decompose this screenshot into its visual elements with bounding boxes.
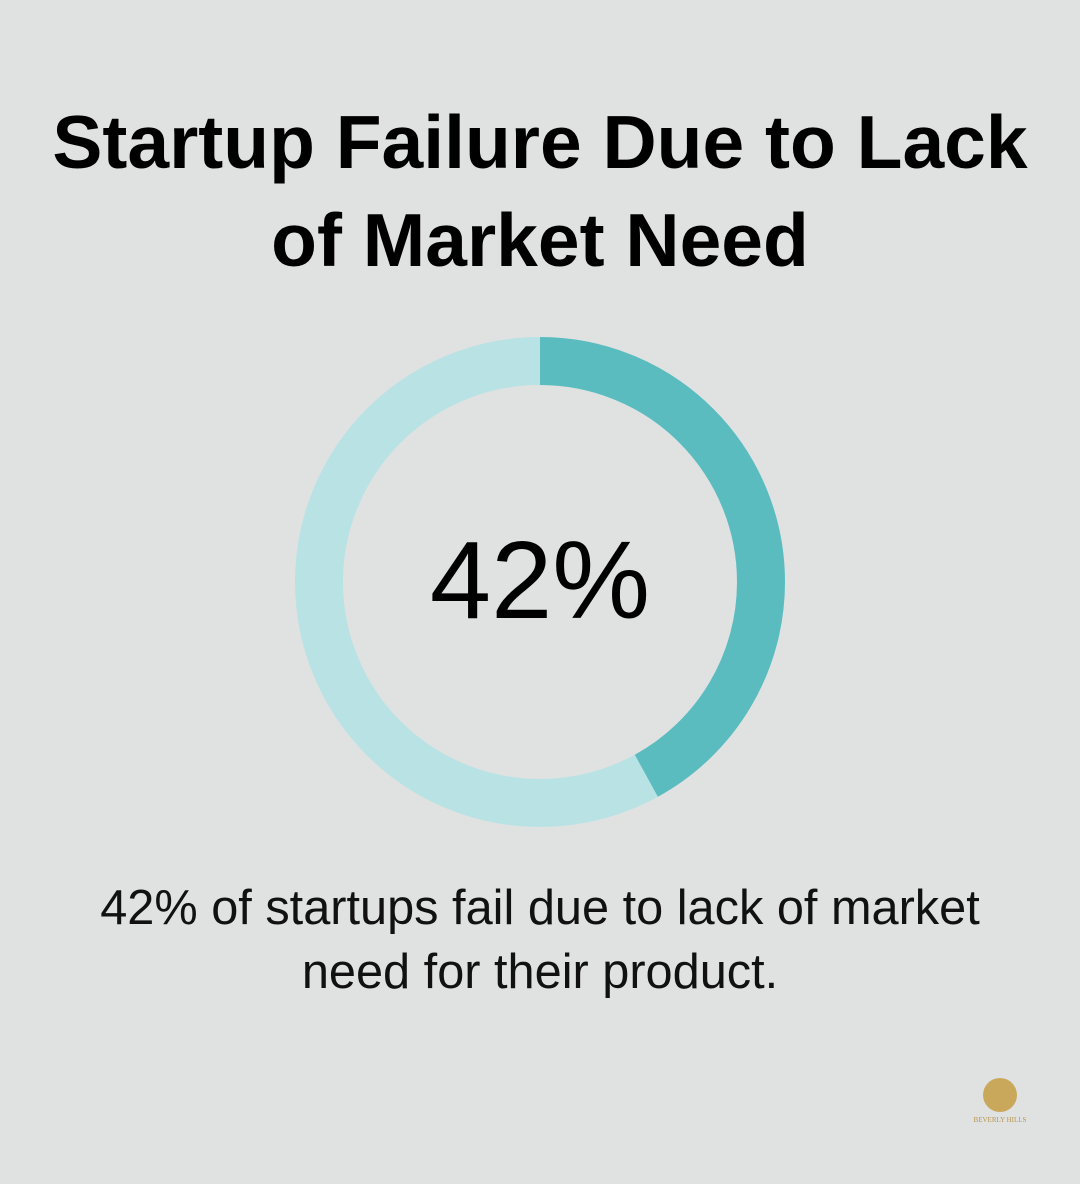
logo: [974, 1078, 1026, 1124]
description text: 42% of startups fail due to lack of market: [100, 881, 980, 935]
donut chart: 42%: [430, 519, 650, 642]
title: [52, 100, 1028, 282]
title: Startup Failure Due to Lack: [52, 100, 1028, 184]
title: of Market Need: [271, 198, 809, 282]
description text: [100, 881, 980, 999]
description text: need for their product.: [302, 945, 778, 999]
logo: BEVERLY HILLS: [974, 1116, 1026, 1124]
